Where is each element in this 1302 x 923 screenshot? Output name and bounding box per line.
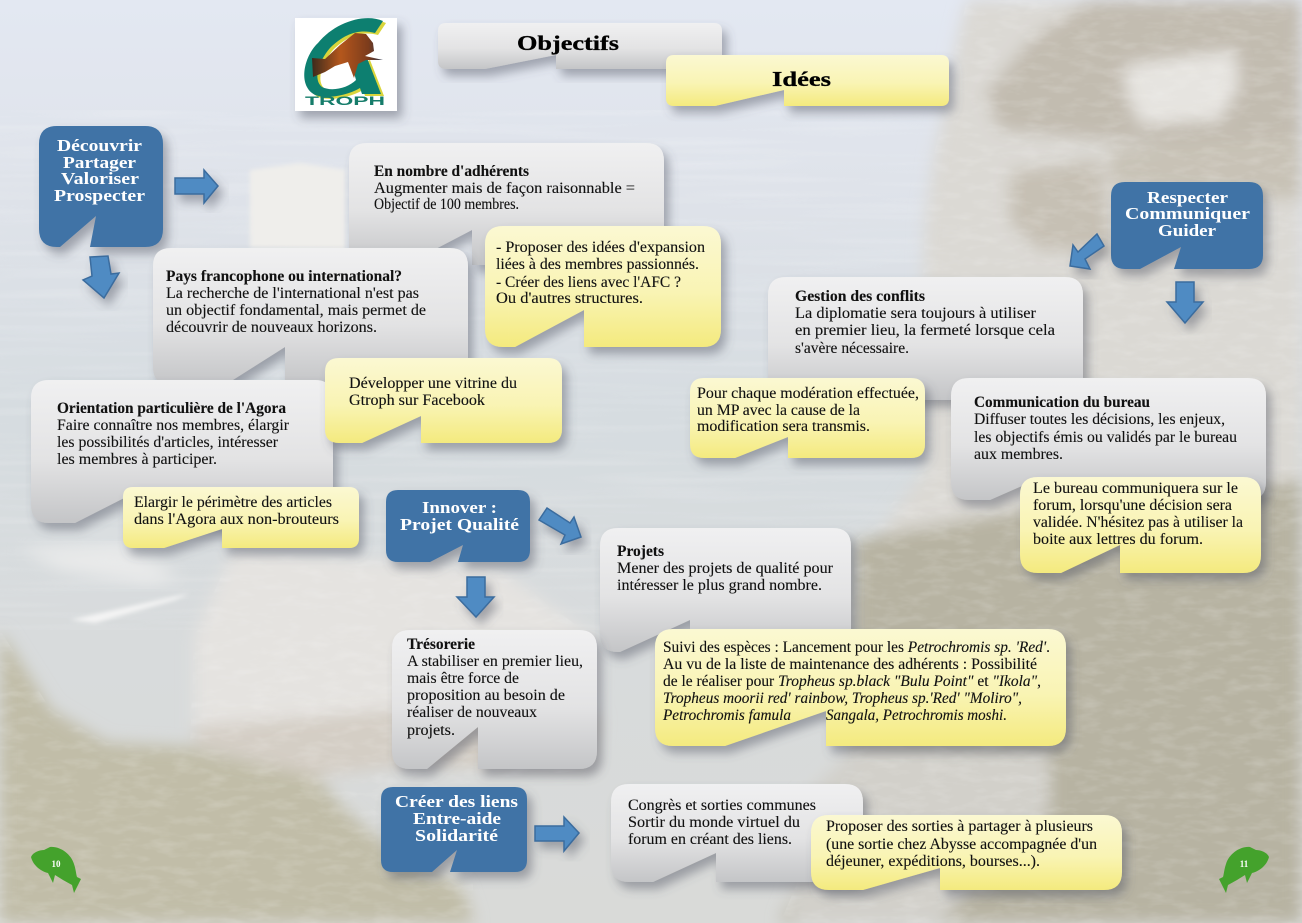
panel: Communication du bureau: les objectifs émis ou validés par le bureau — [974, 429, 1237, 446]
idea: vitrine Facebook: Gtroph sur Facebook — [349, 392, 485, 409]
panel: Gestion des conflits: en premier lieu, la fermeté lorsque cela — [795, 322, 1055, 339]
arrow: Respecter to Communication — [1167, 282, 1203, 323]
panel: Créer des liens, blue heading: Créer des liens — [395, 792, 518, 811]
idea: suivi des espèces: Petrochromis famula — [662, 707, 791, 724]
panel: Projets: intéresser le plus grand nombre. — [617, 577, 822, 594]
idea: sorties à partager: déjeuner, expéditions, bourses...). — [826, 853, 1040, 870]
arrow: Découvrir to Pays — [83, 256, 119, 298]
idea: suivi des espèces: de le réaliser pour Tropheus sp.black "Bulu Point" et "Ikola", — [663, 673, 1041, 690]
panel: Créer des liens, blue heading: Entre-aide — [413, 809, 502, 828]
panel: En nombre d'adhérents: Augmenter mais de façon raisonnable = — [374, 180, 635, 197]
idea: suivi des espèces: Tropheus moorii red' rainbow, Tropheus sp.'Red' "Moliro", — [663, 690, 1022, 707]
panel: Projets — [600, 528, 851, 652]
panel: Orientation particulière de l'Agora: les membres à participer. — [57, 451, 217, 468]
idea: sorties à partager: (une sortie chez Abysse accompagnée d'un — [826, 836, 1097, 853]
idea: bureau et forum: Le bureau communiquera sur le — [1033, 480, 1238, 497]
panel: Trésorerie — [392, 630, 597, 769]
panel: Communication du bureau — [951, 378, 1266, 500]
idea: sorties à partager: Proposer des sorties à partager à plusieurs — [826, 818, 1093, 835]
panel: Congrès et sorties communes — [611, 784, 863, 882]
panel: Innover, blue heading: Projet Qualité — [400, 515, 520, 534]
panel: Trésorerie: mais être force de — [407, 670, 519, 687]
idea: élargir le périmètre: Elargir le périmètre des articles — [134, 494, 332, 511]
panel: Orientation particulière de l'Agora: Orientation particulière de l'Agora — [57, 400, 286, 417]
panel: Respecter, blue heading: Guider — [1158, 221, 1216, 240]
idea: bureau et forum: forum, lorsqu'une décision sera — [1033, 497, 1232, 514]
idea: modération: Pour chaque modération effectuée, — [697, 385, 919, 402]
logo wordmark: TROPH — [305, 94, 385, 108]
idea: expansion: - Proposer des idées d'expansion — [496, 239, 705, 256]
idea: suivi des espèces: Suivi des espèces : Lancement pour les Petrochromis sp. 'Red'. — [663, 639, 1050, 656]
panel: Communication du bureau: aux membres. — [974, 446, 1063, 463]
legend: Objectifs: Objectifs — [517, 31, 619, 55]
panel: Découvrir, blue heading: Partager — [63, 153, 137, 172]
panel: Pays francophone ou international: un objectif fondamental, mais permet de — [166, 302, 426, 319]
panel: Congrès et sorties communes: forum en créant des liens. — [628, 831, 792, 848]
idea: suivi des espèces: Sangala, Petrochromis moshi. — [826, 707, 1007, 724]
idea: bureau et forum: validée. N'hésitez pas à utiliser la — [1033, 514, 1243, 531]
legend: Idées — [666, 55, 949, 106]
idea: élargir le périmètre — [123, 487, 359, 548]
panel: Découvrir, blue heading: Découvrir — [57, 136, 143, 155]
panel: En nombre d'adhérents: En nombre d'adhérents — [374, 163, 529, 180]
arrow: Découvrir to En nombre — [175, 170, 218, 203]
panel: En nombre d'adhérents: Objectif de 100 membres. — [374, 196, 519, 213]
idea: expansion: Ou d'autres structures. — [496, 290, 643, 307]
panel: Congrès et sorties communes: Congrès et sorties communes — [628, 797, 816, 814]
panel: Trésorerie: proposition au besoin de — [407, 687, 565, 704]
arrow: Créer to Congrès — [535, 817, 579, 851]
idea: expansion: - Créer des liens avec l'AFC ? — [496, 274, 681, 291]
panel: Pays francophone ou international: La recherche de l'international n'est pas — [166, 285, 419, 302]
panel: En nombre d'adhérents — [349, 143, 664, 265]
panel: Orientation particulière de l'Agora: Faire connaître nos membres, élargir — [57, 417, 290, 434]
idea: modération: modification sera transmis. — [697, 418, 870, 435]
panel: Pays francophone ou international: Pays francophone ou international? — [166, 268, 402, 285]
panel: Orientation particulière de l'Agora — [31, 380, 333, 523]
page number 10: green fish: 10 — [52, 859, 61, 869]
panel: Gestion des conflits — [768, 277, 1083, 400]
logo fish — [312, 33, 383, 78]
panel: Communication du bureau: Diffuser toutes les décisions, les enjeux, — [974, 411, 1225, 428]
panel: Innover, blue heading — [386, 490, 530, 562]
logo letter G — [304, 18, 386, 99]
idea: suivi des espèces — [655, 629, 1066, 746]
panel: Orientation particulière de l'Agora: les possibilités d'articles, intéresser — [57, 434, 279, 451]
panel: Pays francophone ou international — [153, 248, 468, 385]
idea: modération: un MP avec la cause de la — [697, 402, 860, 419]
panel: Trésorerie: A stabiliser en premier lieu, — [407, 653, 583, 670]
panel: Découvrir, blue heading: Prospecter — [54, 186, 146, 205]
page number 11: green fish: 11 — [1240, 859, 1249, 869]
idea: élargir le périmètre: dans l'Agora aux non-brouteurs — [134, 511, 339, 528]
arrow: Respecter to Gestion — [1070, 234, 1104, 269]
panel: Projets: Projets — [617, 543, 664, 560]
idea: vitrine Facebook: Développer une vitrine du — [349, 375, 517, 392]
panel: Pays francophone ou international: découvrir de nouveaux horizons. — [166, 319, 377, 336]
logo: G Troph — [295, 18, 397, 111]
legend: Objectifs — [438, 23, 722, 69]
panel: Respecter, blue heading: Communiquer — [1125, 204, 1251, 223]
idea: bureau et forum — [1020, 477, 1261, 573]
panel: Trésorerie: projets. — [407, 722, 455, 739]
idea: modération — [690, 378, 925, 458]
page number 10: green fish — [31, 847, 81, 893]
legend: Idées: Idées — [772, 67, 831, 91]
arrow: Innover to Projets — [539, 508, 581, 544]
panel: Trésorerie: Trésorerie — [407, 636, 475, 653]
panel: Gestion des conflits: Gestion des conflits — [795, 288, 925, 305]
panel: Trésorerie: réaliser de nouveaux — [407, 704, 537, 721]
panel: Innover, blue heading: Innover : — [422, 498, 497, 517]
idea: sorties à partager — [811, 815, 1122, 890]
idea: bureau et forum: boite aux lettres du forum. — [1033, 531, 1203, 548]
panel: Gestion des conflits: La diplomatie sera toujours à utiliser — [795, 305, 1037, 322]
panel: Projets: Mener des projets de qualité pour — [617, 560, 834, 577]
panel: Communication du bureau: Communication du bureau — [974, 394, 1150, 411]
panel: Créer des liens, blue heading — [381, 787, 527, 872]
panel: Respecter, blue heading: Respecter — [1147, 188, 1228, 207]
panel: Découvrir, blue heading: Valoriser — [61, 169, 140, 188]
panel: Créer des liens, blue heading: Solidarité — [415, 826, 499, 845]
panel: Découvrir, blue heading — [39, 126, 163, 247]
idea: expansion: liées à des membres passionnés. — [496, 256, 699, 273]
panel: Gestion des conflits: s'avère nécessaire. — [795, 340, 909, 357]
idea: expansion — [485, 226, 721, 347]
arrow: Innover to Trésorerie — [457, 577, 494, 617]
page number 11: green fish — [1219, 847, 1269, 893]
panel: Respecter, blue heading — [1111, 182, 1263, 269]
idea: vitrine Facebook — [325, 358, 562, 443]
panel: Congrès et sorties communes: Sortir du monde virtuel du — [628, 814, 800, 831]
idea: suivi des espèces: Au vu de la liste de maintenance des adhérents : Possibilité — [663, 656, 1037, 673]
